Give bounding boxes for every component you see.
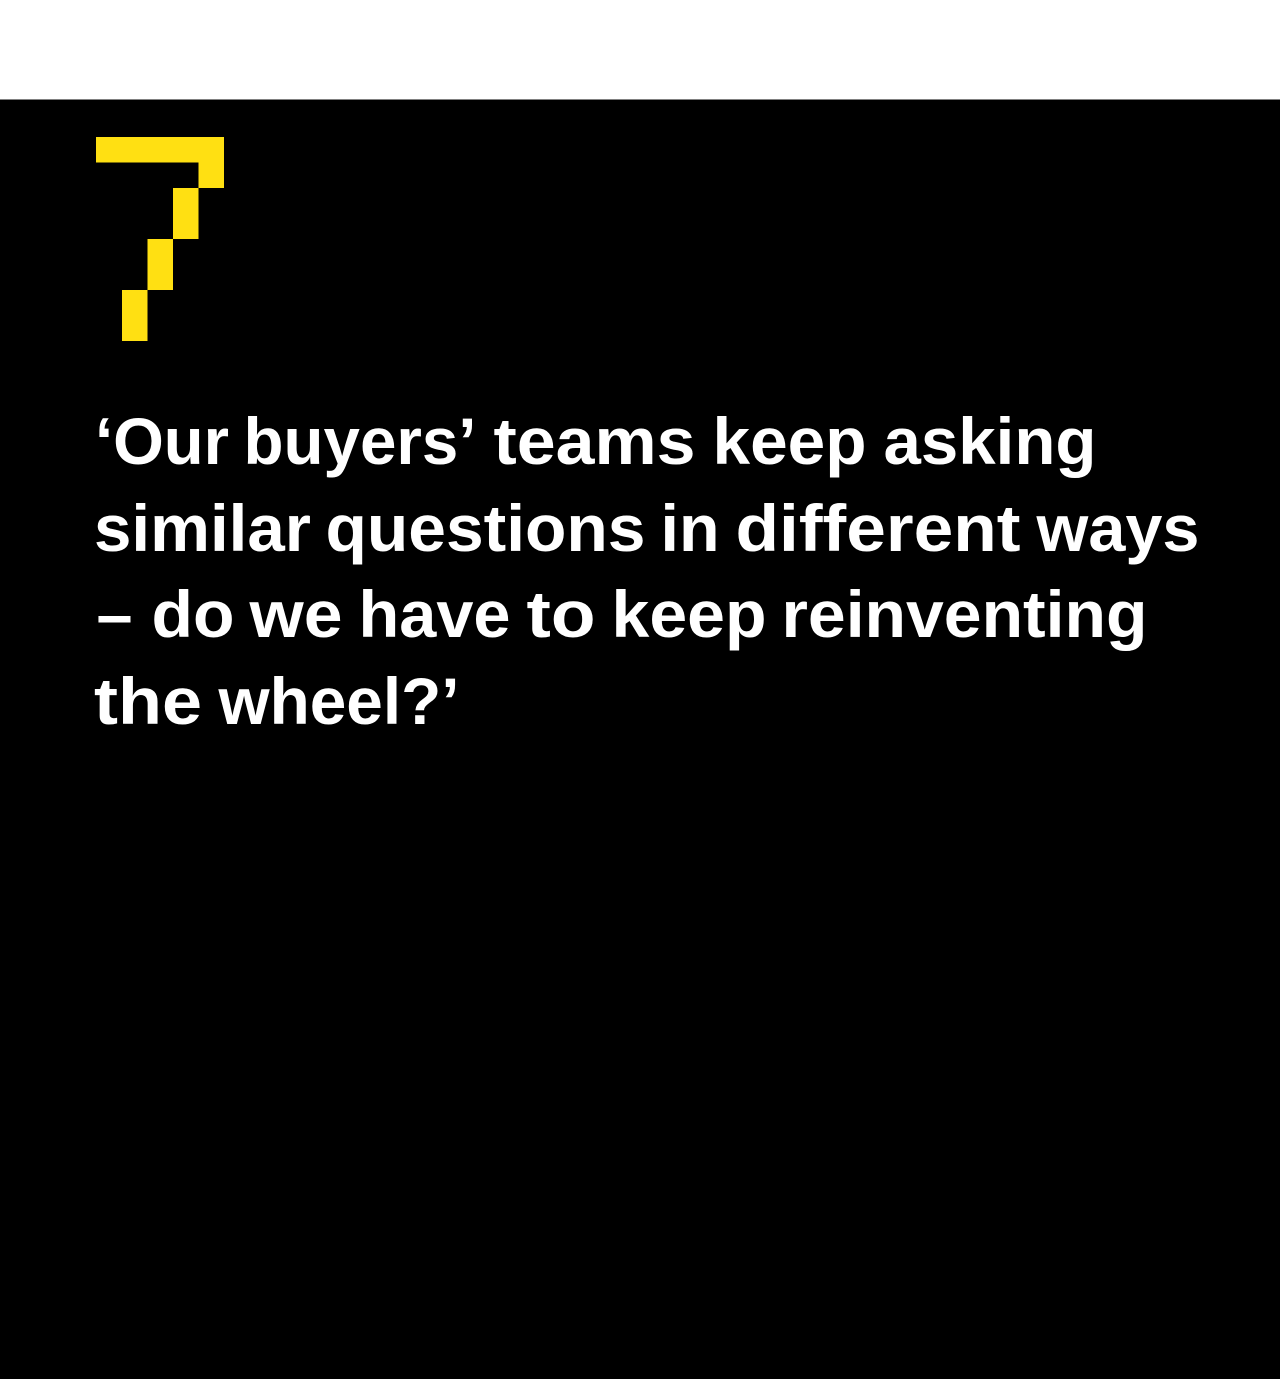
quote text: we [248,577,342,651]
quote text: in [660,491,720,565]
quote text: have [358,577,510,651]
quote text: to [526,577,596,651]
quote text [94,404,1200,738]
quote text: asking [884,404,1096,478]
quote text: teams [494,404,696,478]
quote text: ‘Our [95,404,229,478]
icon: pixel numeral seven [96,137,224,341]
quote text: wheel?’ [218,664,460,738]
quote text: different [736,491,1021,565]
quote text: similar [94,491,311,565]
quote text: keep [712,404,866,478]
quote text: buyers’ [244,404,476,478]
quote text: keep [612,577,766,651]
quote text: the [94,664,202,738]
quote text: do [152,577,234,651]
quote text: reinventing [782,577,1148,651]
quote text: questions [326,491,646,565]
quote text: – [96,577,132,651]
quote text: ways [1035,491,1200,565]
